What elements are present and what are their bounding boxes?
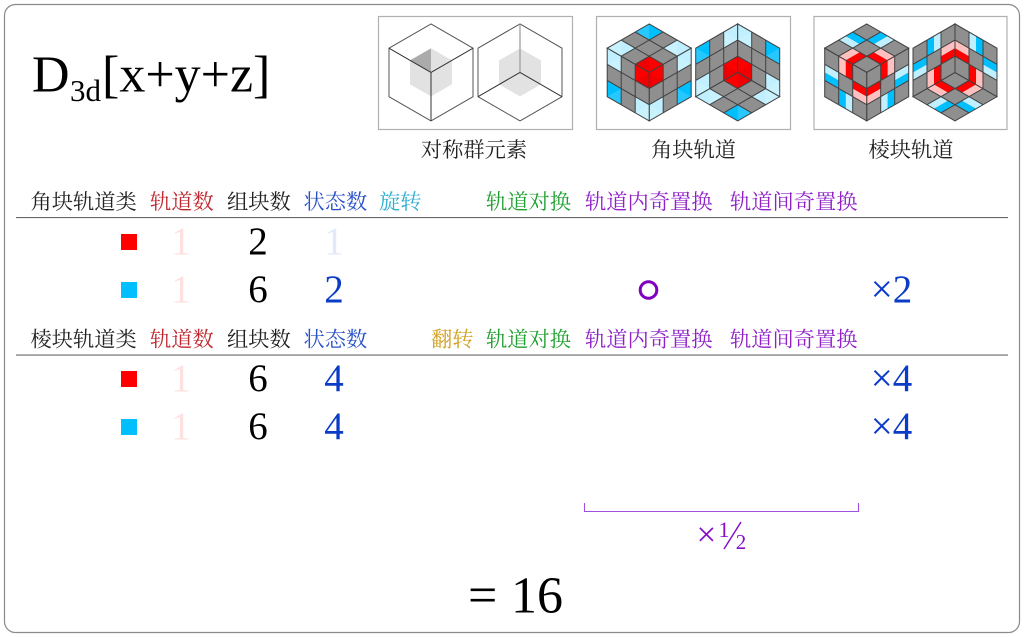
result: = xyxy=(468,568,497,624)
corner row: blue orbit: 2 xyxy=(324,268,344,311)
panel captions: 角块轨道 xyxy=(651,138,736,162)
edge table header: 翻转 xyxy=(431,328,474,352)
panel captions: 对称群元素 xyxy=(421,138,527,162)
corner table header: 旋转 xyxy=(379,190,422,214)
panel captions: 棱块轨道 xyxy=(868,138,954,162)
icon: wireframe cube front xyxy=(389,24,473,121)
edge row: blue orbit: 1 xyxy=(171,405,191,448)
multiplier x4: ×4 xyxy=(871,405,912,448)
edge table header: 棱块轨道类 xyxy=(30,328,137,352)
corner row: blue orbit: 1 xyxy=(171,268,191,311)
icon: edge cube back xyxy=(913,24,997,121)
corner table header: 角块轨道类 xyxy=(30,190,137,214)
corner table header: 轨道数 xyxy=(150,190,214,214)
corner table header: 状态数 xyxy=(304,190,367,214)
edge row: red orbit: 6 xyxy=(248,357,268,400)
corner row: red orbit: 1 xyxy=(171,220,191,263)
corner row: red orbit: 1 xyxy=(324,220,344,263)
panel: corner orbits xyxy=(596,16,790,130)
edge row: red orbit xyxy=(121,357,912,400)
icon: corner cube back xyxy=(696,24,780,121)
edge row: red orbit: 4 xyxy=(324,357,344,400)
icon: edge cube front xyxy=(825,24,909,121)
panel: edge orbits xyxy=(814,16,1007,130)
icon: wireframe cube back xyxy=(478,24,562,121)
title: D xyxy=(32,46,70,104)
panel: symmetry group elements xyxy=(378,16,572,130)
half factor label xyxy=(696,515,746,554)
half factor label: 2 xyxy=(736,530,746,554)
corner table header: 轨道间奇置换 xyxy=(730,190,858,214)
icon: corner cube front xyxy=(607,24,691,121)
corner row: red orbit: 2 xyxy=(248,220,268,263)
result: 16 xyxy=(511,568,563,624)
purple ring marker xyxy=(640,282,657,298)
edge row: blue orbit xyxy=(121,405,912,448)
panel captions xyxy=(421,138,954,162)
half factor label: × xyxy=(696,515,716,554)
edge table header: 状态数 xyxy=(304,328,367,352)
corner row: blue orbit xyxy=(121,268,912,311)
title: 3d xyxy=(70,73,102,108)
edge row: blue orbit: 4 xyxy=(324,405,344,448)
edge table header: 轨道内奇置换 xyxy=(585,328,713,352)
bracket: half factor xyxy=(584,503,858,512)
edge table header: 轨道数 xyxy=(150,328,214,352)
title: [x+y+z] xyxy=(102,46,270,104)
edge row: blue orbit: 6 xyxy=(248,405,268,448)
multiplier x2: ×2 xyxy=(871,268,912,311)
corner row: blue orbit: 6 xyxy=(248,268,268,311)
half factor label: 1 xyxy=(718,517,730,542)
edge table header: 轨道间奇置换 xyxy=(730,328,858,352)
corner table header: 轨道内奇置换 xyxy=(585,190,713,214)
corner table header: 轨道对换 xyxy=(486,190,571,214)
corner row: red orbit xyxy=(121,220,344,263)
edge table header: 轨道对换 xyxy=(486,328,571,352)
corner table header: 组块数 xyxy=(227,190,291,214)
multiplier x4: ×4 xyxy=(871,357,912,400)
edge table header xyxy=(30,328,858,352)
corner table header xyxy=(30,190,858,214)
edge row: red orbit: 1 xyxy=(171,357,191,400)
edge table header: 组块数 xyxy=(227,328,291,352)
